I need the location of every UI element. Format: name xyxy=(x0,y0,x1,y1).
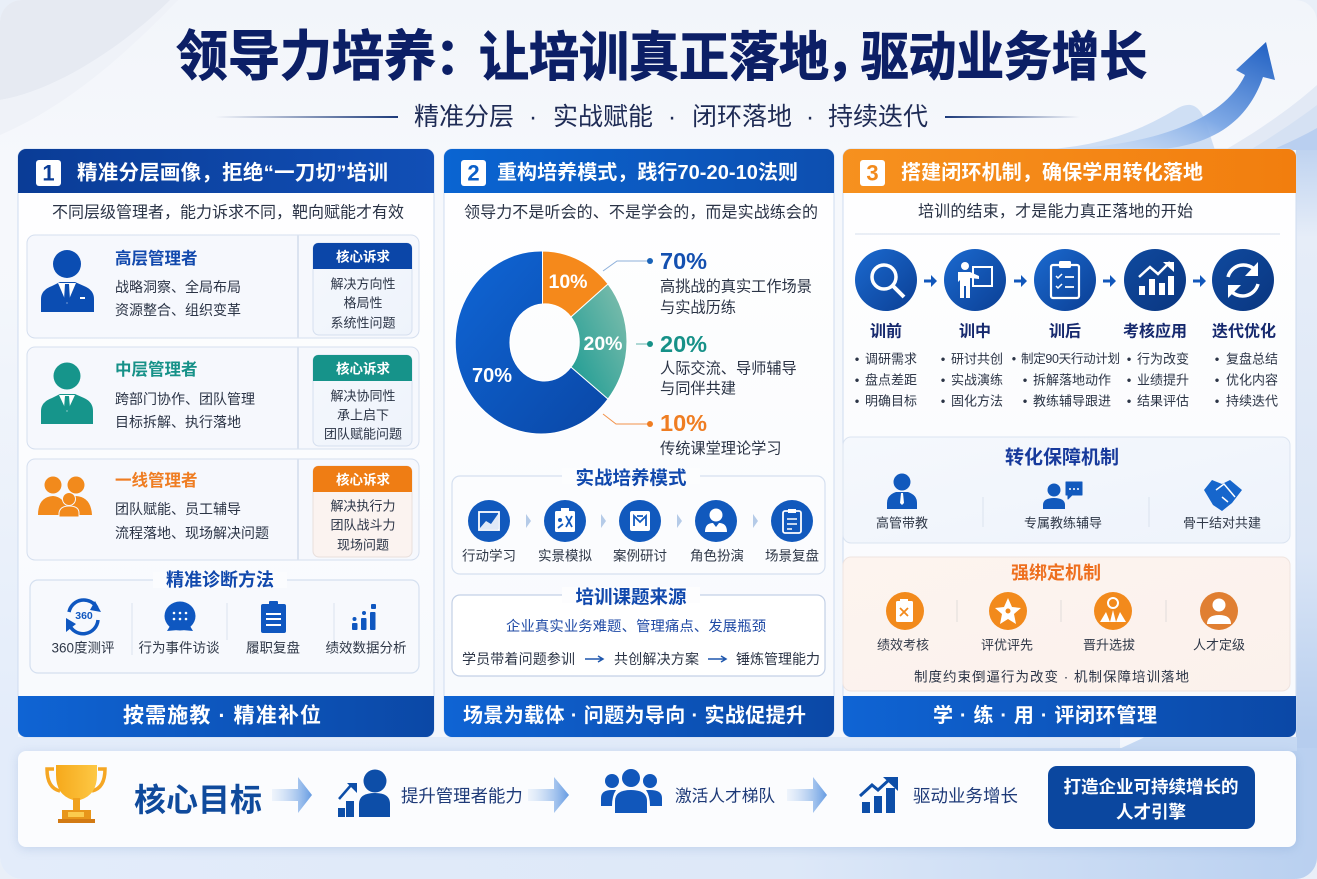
stage: during training: 研讨共创 xyxy=(951,352,1003,366)
card: senior managers: 资源整合、组织变革 xyxy=(115,302,241,318)
card: frontline managers: 流程落地、现场解决问题 xyxy=(115,525,269,541)
stage: after training: 教练辅导跟进 xyxy=(1033,394,1111,408)
icon: capability growth xyxy=(338,770,390,817)
core demand: senior: 解决方向性 xyxy=(330,276,396,292)
card: frontline managers: 一线管理者 xyxy=(115,470,198,490)
stage: iterate: • xyxy=(1215,394,1220,408)
card: senior managers: 战略洞察、全局布局 xyxy=(115,279,241,295)
subtitle: 实战赋能 xyxy=(553,103,653,131)
icon: middle manager xyxy=(41,362,93,424)
stage: assessment: • xyxy=(1127,394,1132,408)
bottom goal bar xyxy=(18,751,1296,847)
core demand: senior: 系统性问题 xyxy=(330,316,396,330)
stage: during training: • xyxy=(941,372,946,388)
icon: awards star xyxy=(989,592,1027,630)
stage: iterate: • xyxy=(1215,352,1220,366)
strong binding box: 评优评先 xyxy=(981,638,1033,652)
stage: after training: 拆解落地动作 xyxy=(1033,372,1111,388)
legend: 70%: 与实战历练 xyxy=(660,300,736,316)
title: 让培训真正落地 xyxy=(479,27,829,87)
panel 1 footer xyxy=(18,696,434,737)
legend: 70%: 高挑战的真实工作场景 xyxy=(660,278,812,296)
icon: 360 xyxy=(66,600,101,634)
title: ， xyxy=(826,29,876,85)
stage: during training: • xyxy=(941,394,946,408)
stage: assessment: 行为改变 xyxy=(1137,352,1189,366)
stage: before training: • xyxy=(855,352,860,366)
stage: iterate xyxy=(1212,249,1278,408)
step: scene review: 场景复盘 xyxy=(765,548,819,564)
callout: talent engine: 人才引擎 xyxy=(1116,802,1186,822)
stage: during training xyxy=(941,249,1006,408)
stage: assessment: • xyxy=(1127,352,1132,366)
step: scenario simulation: 实景模拟 xyxy=(538,548,592,564)
panel 3 footer xyxy=(843,696,1296,737)
stage: assessment: 结果评估 xyxy=(1137,394,1189,408)
title: 驱动业务增长 xyxy=(861,28,1147,86)
arrow to business xyxy=(787,777,827,813)
step: case study xyxy=(613,500,667,564)
stage: iterate: 优化内容 xyxy=(1226,372,1278,388)
panel 1 header: 1 xyxy=(42,160,55,186)
stage: iterate: • xyxy=(1215,372,1220,388)
card: middle managers: 中层管理者 xyxy=(115,359,198,379)
panel 1: layered portraits xyxy=(18,149,434,737)
transfer guarantee box: 高管带教 xyxy=(876,516,928,530)
stage: assessment: 业绩提升 xyxy=(1137,372,1189,388)
topic sources box: 培训课题来源 xyxy=(575,586,687,608)
legend: 70%: 70% xyxy=(660,248,707,274)
stage: after training: 训后 xyxy=(1049,322,1081,340)
icon: trophy xyxy=(47,765,105,823)
bottom goal bar: 驱动业务增长 xyxy=(913,786,1018,806)
stage: iterate: 复盘总结 xyxy=(1226,352,1278,366)
bottom goal bar: 提升管理者能力 xyxy=(401,786,523,806)
core demand: middle: 核心诉求 xyxy=(336,360,390,376)
donut chart: 70% xyxy=(472,365,512,387)
panel 3 header xyxy=(843,149,1296,193)
step: scenario simulation xyxy=(538,500,592,564)
icon: interview bubble xyxy=(164,602,196,631)
diagnosis methods box: 履职复盘 xyxy=(246,640,300,656)
stage: before training: 盘点差距 xyxy=(865,372,917,388)
strong binding box xyxy=(843,557,1290,691)
core demand: frontline xyxy=(313,466,412,557)
subtitle: · xyxy=(668,103,676,131)
topic sources box: 企业真实业务难题、管理痛点、发展瓶颈 xyxy=(506,617,766,635)
strong binding box: 制度约束倒逼行为改变 · 机制保障培训落地 xyxy=(914,670,1190,684)
core demand: senior: 核心诉求 xyxy=(336,248,390,264)
topic sources box xyxy=(452,586,825,676)
icon: frontline team xyxy=(38,476,92,517)
step: scene review xyxy=(765,500,819,564)
subtitle: · xyxy=(806,103,814,131)
subtitle: 精准分层 xyxy=(414,103,514,131)
stage: during training: 训中 xyxy=(959,322,991,340)
stage: during training: 实战演练 xyxy=(951,372,1003,388)
icon: clipboard review xyxy=(261,601,286,633)
stage: during training: • xyxy=(941,352,946,366)
legend: 20% xyxy=(636,331,797,398)
icon: coach xyxy=(1043,482,1082,509)
donut chart xyxy=(455,251,627,434)
stage: after training: 制定90天行动计划 xyxy=(1021,351,1120,366)
core demand: frontline: 团队战斗力 xyxy=(330,518,396,532)
panel 3 footer: 学 · 练 · 用 · 评闭环管理 xyxy=(933,703,1157,727)
core demand: senior: 格局性 xyxy=(343,296,383,310)
step: action learning xyxy=(462,500,516,564)
core demand: middle: 承上启下 xyxy=(337,408,389,422)
topic sources box: 共创解决方案 xyxy=(614,651,699,667)
donut chart: 20% xyxy=(583,333,623,355)
core demand: middle: 解决协同性 xyxy=(330,388,396,404)
stage: after training: • xyxy=(1023,394,1028,408)
panel 1 intro text: 不同层级管理者，能力诉求不同，靶向赋能才有效 xyxy=(52,204,404,222)
stage: assessment: 考核应用 xyxy=(1123,322,1187,340)
strong binding box: 强绑定机制 xyxy=(1011,562,1101,583)
step: action learning: 行动学习 xyxy=(462,548,516,564)
legend: 10% xyxy=(603,410,782,458)
stage: during training: 固化方法 xyxy=(951,394,1003,408)
panel 3 header: 3 xyxy=(866,160,879,186)
legend: 70% xyxy=(603,248,812,316)
icon: promotion xyxy=(1094,592,1132,630)
legend: 20%: 20% xyxy=(660,331,707,357)
icon: talent team xyxy=(601,769,662,813)
stage: iterate: 持续迭代 xyxy=(1226,394,1278,408)
title xyxy=(176,27,1147,87)
panel 2 header xyxy=(444,149,834,193)
subtitle: 持续迭代 xyxy=(828,103,928,131)
legend: 20%: 人际交流、导师辅导 xyxy=(660,360,797,378)
card: frontline managers: 团队赋能、员工辅导 xyxy=(115,501,241,517)
stage: before training: • xyxy=(855,394,860,408)
growth arrow decoration xyxy=(1040,42,1275,150)
stage: after training xyxy=(1012,249,1120,408)
topic sources box: 学员带着问题参训 xyxy=(462,651,575,667)
core demand: frontline: 现场问题 xyxy=(337,538,389,552)
step: role play xyxy=(690,500,744,564)
chevrons between steps xyxy=(526,514,758,528)
topic sources box: 锤炼管理能力 xyxy=(736,651,820,667)
legend: 10%: 传统课堂理论学习 xyxy=(660,440,782,458)
core demand: middle xyxy=(313,355,412,446)
icon: handshake xyxy=(1204,480,1242,511)
panel 2 header: 重构培养模式，践行70-20-10法则 xyxy=(497,160,798,184)
bottom goal bar: 激活人才梯队 xyxy=(675,786,775,806)
diagnosis methods box: 精准诊断方法 xyxy=(166,569,274,590)
core demand: senior xyxy=(313,243,412,335)
card: senior managers: 高层管理者 xyxy=(115,248,198,268)
stage: before training xyxy=(855,249,917,408)
transfer guarantee box xyxy=(843,437,1290,543)
icon: performance xyxy=(886,592,924,630)
core demand: middle: 团队赋能问题 xyxy=(324,426,402,442)
stage: after training: • xyxy=(1023,372,1028,388)
diagnosis methods box: 绩效数据分析 xyxy=(326,640,406,656)
panel 1 header xyxy=(18,149,434,193)
panel 1 header: 精准分层画像，拒绝“一刀切”培训 xyxy=(77,160,388,184)
practice modes box xyxy=(452,468,825,574)
core demand: frontline: 解决执行力 xyxy=(330,498,396,514)
title: 领导力培养 xyxy=(176,27,436,87)
panel 2: 70-20-10 model xyxy=(444,149,834,737)
card: senior managers xyxy=(27,235,419,338)
subtitle xyxy=(215,103,1080,131)
strong binding box: 绩效考核 xyxy=(877,638,929,652)
step: role play: 角色扮演 xyxy=(690,548,744,564)
stage: assessment xyxy=(1123,249,1189,408)
icon: business growth xyxy=(860,777,898,813)
stage: before training: 明确目标 xyxy=(865,394,917,408)
stage: after training: • xyxy=(1012,352,1016,366)
icon: data bars xyxy=(352,604,376,630)
callout: talent engine: 打造企业可持续增长的 xyxy=(1064,777,1238,797)
card: middle managers: 跨部门协作、团队管理 xyxy=(115,391,255,407)
stage: iterate: 迭代优化 xyxy=(1212,322,1276,340)
icon: senior manager xyxy=(41,250,94,312)
stage: assessment: • xyxy=(1127,372,1132,388)
donut chart: 10% xyxy=(548,271,588,293)
strong binding box: 晋升选拔 xyxy=(1083,638,1135,652)
card: frontline managers xyxy=(27,459,419,560)
diagnosis methods box: 360度测评 xyxy=(51,640,115,656)
panel 3 header: 搭建闭环机制，确保学用转化落地 xyxy=(901,161,1203,184)
diagnosis methods box xyxy=(30,569,419,673)
step: case study: 案例研讨 xyxy=(613,548,667,564)
transfer guarantee box: 专属教练辅导 xyxy=(1024,516,1102,530)
transfer guarantee box: 转化保障机制 xyxy=(1005,446,1119,468)
stage: before training: 训前 xyxy=(870,322,902,340)
stage: before training: • xyxy=(855,372,860,388)
stage: before training: 调研需求 xyxy=(865,352,917,366)
callout: talent engine xyxy=(1048,766,1255,829)
arrow to capability xyxy=(272,777,312,813)
strong binding box: 人才定级 xyxy=(1193,638,1245,652)
card: middle managers xyxy=(27,347,419,449)
legend: 10%: 10% xyxy=(660,410,707,436)
panel 2 intro text: 领导力不是听会的、不是学会的，而是实战练会的 xyxy=(464,204,818,222)
title: ： xyxy=(435,29,485,85)
arrow to talent xyxy=(528,777,569,813)
core demand: frontline: 核心诉求 xyxy=(336,472,390,488)
panel 3: closed-loop mechanism xyxy=(843,149,1296,737)
icon: executive xyxy=(887,474,917,509)
card: middle managers: 目标拆解、执行落地 xyxy=(115,414,241,430)
panel 2 header: 2 xyxy=(467,160,480,186)
icon: talent grade xyxy=(1200,592,1238,630)
panel 3 intro text: 培训的结束，才是能力真正落地的开始 xyxy=(918,202,1193,220)
practice modes box: 实战培养模式 xyxy=(575,468,687,488)
transfer guarantee box: 骨干结对共建 xyxy=(1183,516,1261,530)
panel 2 footer: 场景为载体 · 问题为导向 · 实战促提升 xyxy=(463,703,806,727)
subtitle: 闭环落地 xyxy=(692,103,792,131)
legend: 20%: 与同伴共建 xyxy=(660,380,736,398)
panel 1 footer: 按需施教 · 精准补位 xyxy=(123,704,321,728)
panel 2 footer xyxy=(444,696,834,737)
subtitle: · xyxy=(529,103,537,131)
bottom goal bar: 核心目标 xyxy=(134,782,262,818)
arrows between stages xyxy=(924,275,1206,287)
diagnosis methods box: 行为事件访谈 xyxy=(138,640,220,656)
icon: 360: 360 xyxy=(75,610,93,622)
